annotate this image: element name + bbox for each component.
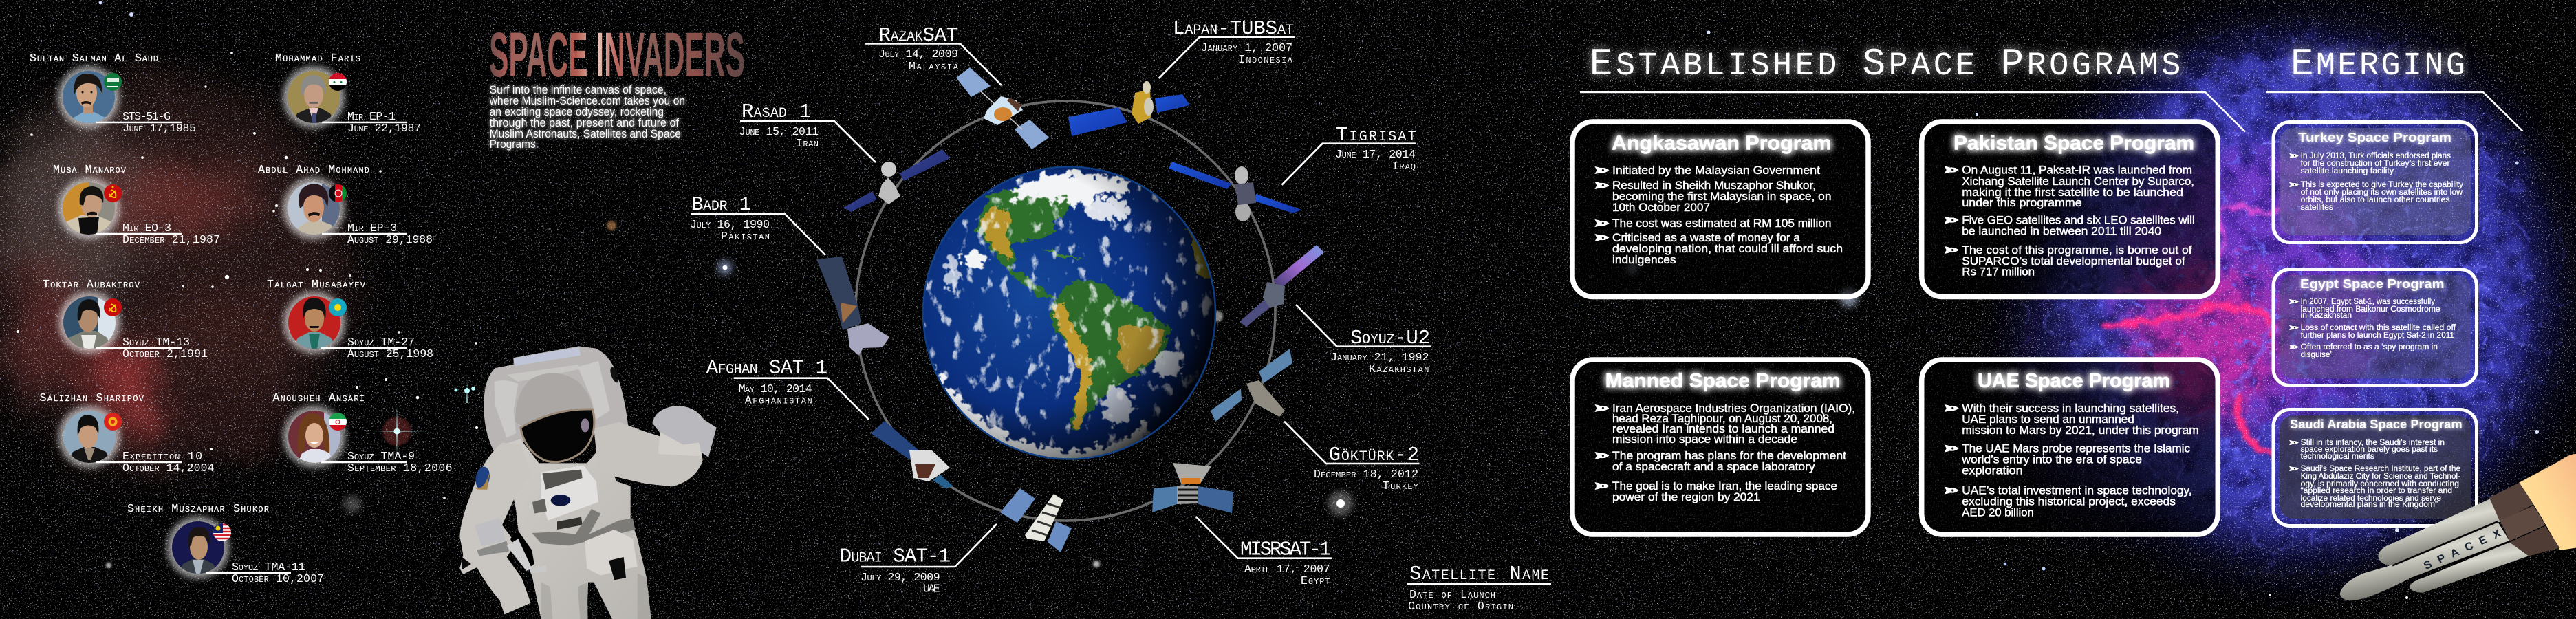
satellite: Lapan-TUBSat (1068, 81, 1190, 136)
label: Afghan SAT 1: Afghanistan (745, 394, 812, 407)
card body: satellite launching facility (2301, 167, 2394, 175)
mission line (322, 233, 407, 235)
card body: mission into space within a decade (1612, 433, 1797, 446)
panel: UAE Space Program (1922, 360, 2218, 534)
flag: Kazakhstan (329, 298, 347, 316)
card body: Rs 717 million (1962, 265, 2035, 279)
label: MISRSAT-1: MISRSAT-1 (1240, 539, 1331, 561)
card body: The cost of this programme, is borne out of (1962, 243, 2192, 257)
satellite: Göktürk-2 (1211, 349, 1292, 422)
label: Soyuz-U2: Kazakhstan (1369, 362, 1429, 376)
satellite: Badr 1 (816, 257, 889, 356)
label: Afghan SAT 1: May 10, 2014 (739, 382, 812, 395)
label: Göktürk-2 (1314, 444, 1419, 492)
mission: Soyuz TMA-9 (347, 450, 415, 463)
portrait (58, 292, 120, 354)
satellite: RazakSAT (956, 67, 1049, 149)
astronaut: Muhammad Faris (275, 52, 421, 135)
date: June 22,1987 (347, 122, 421, 135)
satellite: Rasad 1 (843, 149, 950, 212)
card body: under this programme (1962, 196, 2082, 209)
intro text: Muslim Astronauts, Satellites and Space (490, 127, 681, 140)
card body: UAE plans to send an unmanned (1962, 413, 2134, 426)
label: Soyuz-U2: Soyuz-U2 (1350, 327, 1430, 349)
date: October 14,2004 (122, 461, 215, 475)
label: Afghan SAT 1 (706, 357, 827, 407)
heading: established space programs: ESTABLISHED SPACE PROGRAMS (1590, 42, 2184, 86)
card body: technological merits (2301, 453, 2374, 461)
card body: Initiated by the Malaysian Government (1612, 164, 1820, 177)
card body (2301, 439, 2460, 509)
card body: orbits, but also to launch other countries (2301, 196, 2450, 204)
portrait (58, 66, 120, 128)
intro text: where Muslim-Science.com takes you on (489, 94, 685, 107)
label: Lapan-TUBSat: Lapan-TUBSat (1173, 17, 1294, 40)
label: RazakSAT: July 14, 2009 (878, 47, 958, 61)
heading: emerging: EMERGING (2291, 42, 2467, 86)
card body: The program has plans for the development (1612, 449, 1846, 462)
card body: Iran Aerospace Industries Organization (IAIO), (1612, 402, 1855, 415)
card body: 10th October 2007 (1612, 201, 1710, 214)
card title: UAE Space Program (1978, 370, 2170, 392)
card body: On August 11, Paksat-IR was launched from (1962, 164, 2192, 177)
astronaut: Sultan Salman Al Saud (30, 52, 196, 135)
card body: satellites (2301, 204, 2333, 212)
label: Tigrisat: June 17, 2014 (1335, 148, 1416, 161)
label: Lapan-TUBSat (1173, 17, 1294, 66)
earth (922, 165, 1217, 475)
card body: be launched in between 2011 till 2040 (1962, 225, 2161, 238)
intro text: through the past, present and future of (490, 116, 679, 129)
portrait (58, 406, 120, 468)
label: Göktürk-2: Göktürk-2 (1329, 444, 1419, 466)
card body: Resulted in Sheikh Muszaphor Shukor, (1612, 179, 1816, 192)
mission: Mir EP-1 (347, 110, 396, 123)
date: August 25,1998 (347, 347, 433, 360)
satellite: Soyuz-U2 (1240, 245, 1324, 327)
panel: Turkey Space Program (2273, 122, 2476, 242)
name: Sheikh Muszaphar Shukor (127, 502, 269, 515)
panel: Pakistan Space Program (1922, 122, 2218, 297)
orion nebula background (0, 76, 351, 475)
leader lines (691, 37, 1431, 567)
label: Soyuz-U2 (1330, 327, 1430, 376)
card body: revealed Iran intends to launch a manned (1612, 422, 1834, 435)
heading: emerging (2266, 42, 2523, 131)
label: Rasad 1: Iran (796, 137, 819, 150)
card body: world’s entry into the era of space (1961, 453, 2142, 466)
card body: Five GEO satellites and six LEO satellites will (1962, 214, 2195, 227)
card body: becoming the first Malaysian in space, on (1612, 190, 1831, 203)
card body: This is expected to give Turkey the capability (2301, 181, 2463, 189)
label: Tigrisat: Tigrisat (1336, 124, 1416, 146)
label: Rasad 1: Rasad 1 (742, 100, 811, 123)
card title: Turkey Space Program (2298, 131, 2451, 144)
card body: making it the first satellite to be launched (1962, 186, 2183, 199)
label: Dubai SAT-1 (840, 545, 951, 596)
label: Badr 1: July 16, 1990 (690, 218, 770, 231)
mission: STS-51-G (122, 110, 171, 123)
card body: in Kazakhstan (2301, 312, 2352, 320)
card body: Loss of contact with this satellite called off (2301, 324, 2456, 332)
card body: The goal is to make Iran, the leading space (1612, 479, 1837, 492)
rocket (2340, 454, 2576, 600)
card body: mission to Mars by 2021, under this program (1962, 424, 2199, 437)
flag: Kyrgyzstan (104, 413, 122, 431)
flag: Syria (329, 73, 347, 91)
mission line (322, 122, 407, 123)
card body: In July 2013, Turk officials endorsed plans (2301, 152, 2451, 160)
label: Badr 1: Badr 1 (691, 193, 751, 216)
card body: Xichang Satellite Launch Center by Suparco, (1962, 175, 2194, 188)
card body: The cost was estimated at RM 105 million (1612, 217, 1831, 230)
mission line (96, 347, 182, 349)
mission: Mir EP-3 (347, 221, 397, 235)
astronaut: Sheikh Muszaphar Shukor (127, 502, 324, 585)
card body: for the construction of Turkey’s first ever (2301, 160, 2450, 168)
card body (2301, 298, 2456, 359)
legend: satellite label key (1407, 563, 1551, 613)
flag: USSR (104, 298, 122, 316)
label: RazakSAT: Malaysia (909, 60, 959, 73)
card body: Saudi’s Space Research Institute, part of the (2301, 465, 2460, 473)
card body: With their success in launching satellites, (1962, 402, 2179, 415)
card body: “applied research in order to transfer and (2301, 487, 2452, 495)
label: Rasad 1 (739, 100, 819, 150)
card body: space exploration barely goes past its (2301, 446, 2438, 454)
name: Muhammad Faris (275, 52, 360, 65)
mission line (96, 233, 182, 235)
card title: Angkasawan Program (1612, 133, 1831, 155)
label: Dubai SAT-1: UAE (923, 583, 940, 596)
label: RazakSAT: RazakSAT (879, 24, 958, 47)
panel: Manned Space Program (1572, 360, 1868, 534)
label: Badr 1: Pakistan (721, 230, 770, 243)
card body: launched from Baikonur Cosmodrome (2301, 305, 2440, 314)
label: RazakSAT (878, 24, 959, 73)
label: Göktürk-2: Turkey (1383, 479, 1418, 492)
rocket lettering: SPACEX (2422, 528, 2503, 572)
portrait (283, 406, 345, 468)
mission: Soyuz TM-13 (122, 336, 190, 349)
mission: Expedition 10 (122, 450, 202, 463)
date: September 18,2006 (347, 461, 453, 475)
card body: SUPARCO’s total developmental budget of (1962, 254, 2185, 268)
mission: Soyuz TM-27 (347, 336, 415, 349)
intro text: Programs. (490, 138, 539, 151)
label: MISRSAT-1: April 17, 2007 (1244, 563, 1330, 576)
card body (1612, 402, 1855, 503)
legend: satellite label key: Satellite Name (1409, 563, 1549, 585)
card body (2301, 152, 2463, 212)
name: Talgat Musabayev (267, 278, 366, 291)
label: Dubai SAT-1: July 29, 2009 (861, 571, 940, 584)
name: Sultan Salman Al Saud (30, 52, 158, 65)
mission: Soyuz TMA-11 (232, 561, 305, 574)
label: Lapan-TUBSat: Indonesia (1238, 53, 1293, 66)
name: Anousheh Ansari (272, 391, 365, 404)
card body: disguise’ (2301, 351, 2332, 359)
flag: Afghanistan (329, 184, 347, 202)
flag: USSR (104, 184, 122, 202)
card body: developmental plans in the Kingdom” (2301, 501, 2438, 509)
astronaut: Toktar Aubakirov (43, 278, 208, 360)
label: Dubai SAT-1: Dubai SAT-1 (840, 545, 951, 568)
name: Salizhan Sharipov (40, 391, 144, 404)
label: MISRSAT-1: Egypt (1301, 574, 1330, 587)
label: Lapan-TUBSat: January 1, 2007 (1201, 41, 1292, 54)
intro text (489, 83, 685, 151)
card body: Often referred to as a ‘spy program in (2301, 343, 2438, 351)
mission line (206, 572, 291, 574)
satellite: MISRSAT-1 (1152, 463, 1233, 513)
card body: UAE’s total investment in space technology, (1962, 484, 2192, 497)
card body: Criticised as a waste of money for a (1612, 231, 1801, 244)
name: Toktar Aubakirov (43, 278, 140, 291)
date: August 29,1988 (347, 233, 433, 246)
legend: satellite label key: Country of Origin (1408, 600, 1513, 613)
card body: AED 20 billion (1962, 506, 2034, 519)
satellite: Dubai SAT-1 (1000, 488, 1072, 552)
label: Göktürk-2: December 18, 2012 (1314, 468, 1418, 481)
card body: King Abdulaziz City for Science and Technol- (2301, 473, 2460, 481)
mission line (96, 461, 182, 463)
card body: In 2007, Egypt Sat-1, was successfully (2301, 298, 2435, 306)
date: June 17,1985 (122, 122, 196, 135)
card body: power of the region by 2021 (1612, 490, 1760, 503)
portrait (283, 177, 345, 239)
mission: Mir EO-3 (122, 221, 171, 235)
card title: Pakistan Space Program (1953, 133, 2194, 155)
portrait (58, 177, 120, 239)
astronaut: Abdul Ahad Mohmand (258, 163, 433, 246)
mission line (321, 347, 407, 349)
label: Rasad 1: June 15, 2011 (739, 125, 819, 138)
card body: indulgences (1612, 253, 1676, 266)
label: Tigrisat: Iraq (1392, 160, 1416, 173)
card body: ogy, is primarily concerned with conducting (2301, 480, 2459, 488)
portrait (283, 66, 345, 128)
astronaut figure (459, 346, 717, 619)
card body: head Reza Taghipour, on August 20, 2008, (1612, 412, 1832, 425)
mission line (96, 122, 182, 123)
lens flare stars (375, 378, 475, 457)
date: October 2,1991 (122, 347, 208, 360)
portrait (167, 517, 229, 578)
panel: Egypt Space Program (2273, 270, 2476, 385)
label: MISRSAT-1 (1240, 539, 1331, 587)
card body: of a spacecraft and a space laboratory (1612, 460, 1815, 473)
intro text: Surf into the infinite canvas of space, (490, 83, 667, 96)
card body (1962, 164, 2195, 279)
flag: Malaysia (213, 523, 231, 541)
card body: of not only placing its own satellites into low (2301, 188, 2463, 197)
card body: localize related technologies and serve (2301, 495, 2441, 503)
card body (1961, 402, 2199, 519)
date: December 21,1987 (122, 233, 220, 246)
flag: Iran (329, 413, 347, 431)
panel: Angkasawan Program (1572, 122, 1868, 297)
card body: Still in its infancy, the Saudi’s interest in (2301, 439, 2445, 447)
name: Abdul Ahad Mohmand (258, 163, 369, 176)
card body: excluding this historical project, exceeds (1962, 495, 2176, 508)
card title: Egypt Space Program (2300, 277, 2445, 291)
card body: The UAE Mars probe represents the Islamic (1962, 442, 2191, 455)
text: SPACE INVADERS (489, 20, 745, 90)
card title: Saudi Arabia Space Program (2290, 417, 2463, 431)
card body: exploration (1962, 464, 2023, 477)
card body: further plans to launch Egypt Sat-2 in 2011 (2301, 332, 2454, 340)
label: Afghan SAT 1: Afghan SAT 1 (706, 357, 827, 380)
label: Soyuz-U2: January 21, 1992 (1330, 351, 1429, 364)
satellite: Tigrisat (1169, 162, 1301, 221)
card title: Manned Space Program (1605, 370, 1841, 392)
intro text: an exciting space odyssey, rocketing (490, 105, 664, 118)
mission line (321, 461, 407, 463)
satellite: Afghan SAT 1 (871, 421, 953, 488)
astronaut: Salizhan Sharipov (40, 391, 215, 475)
name: Musa Manarov (53, 163, 127, 176)
panel: Saudi Arabia Space Program (2273, 410, 2476, 525)
astronaut: Talgat Musabayev (267, 278, 433, 360)
date: October 10,2007 (232, 572, 324, 585)
label: Tigrisat (1335, 124, 1416, 173)
legend: satellite label key: Date of Launch (1409, 588, 1495, 601)
purple nebula background (1981, 0, 2576, 619)
flag: Saudi Arabia (104, 73, 122, 91)
earth limb (923, 166, 1215, 459)
label: Badr 1 (690, 193, 770, 243)
astronaut: Musa Manarov (53, 163, 220, 246)
card body: developing nation, that could ill afford such (1612, 242, 1843, 255)
astronaut: Anousheh Ansari (272, 391, 453, 475)
orbit ring (856, 101, 1275, 521)
heading: established space programs (1580, 42, 2245, 132)
portrait (283, 292, 345, 354)
card body (1612, 164, 1843, 266)
